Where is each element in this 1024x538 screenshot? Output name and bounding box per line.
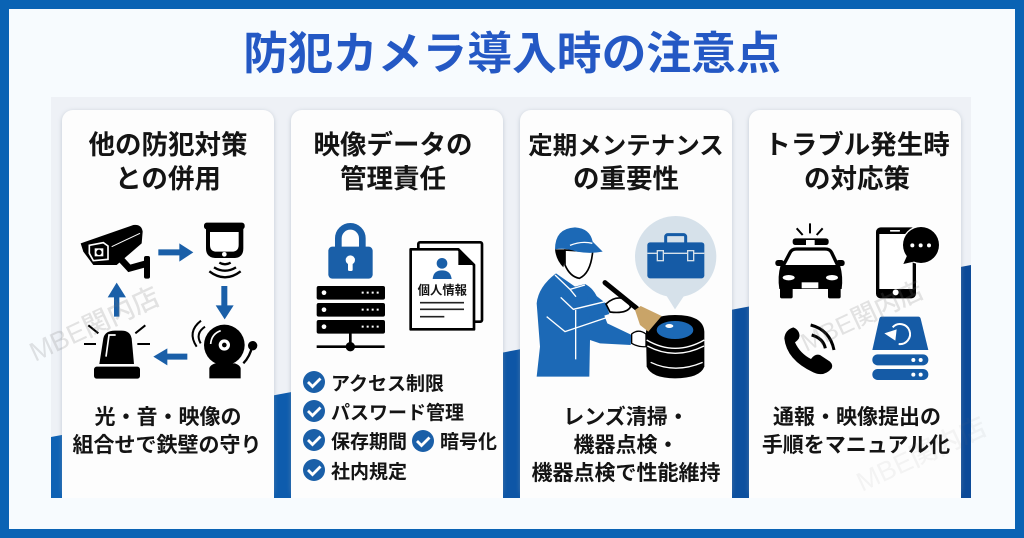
- caption: 手順をマニュアル化: [762, 434, 950, 457]
- icon: server: [317, 286, 385, 351]
- arrow: up: [108, 283, 126, 317]
- icons: response tools: [775, 223, 940, 380]
- icon: siren: [84, 325, 150, 379]
- check item: [303, 459, 407, 483]
- panel: trouble response: [749, 110, 961, 498]
- check item: 保存期間: [331, 431, 407, 453]
- icon: technician cleaning lens: [537, 216, 716, 378]
- caption: レンズ清掃・: [563, 405, 689, 429]
- caption: 組合せで鉄壁の守り: [72, 434, 262, 457]
- check item: 社内規定: [331, 461, 407, 483]
- arrow: left: [153, 348, 187, 365]
- title: 防犯カメラ導入時の注意点: [243, 29, 781, 79]
- arrow: down: [216, 286, 234, 319]
- check item: パスワード管理: [331, 401, 464, 424]
- checklist: [303, 371, 497, 483]
- icon: worker: [537, 227, 646, 377]
- caption: [762, 406, 950, 457]
- icon: security cycle: [81, 223, 257, 379]
- watermarks: [25, 276, 991, 497]
- heading: トラブル発生時: [764, 130, 950, 160]
- heading: との併用: [115, 164, 221, 194]
- caption: 光・音・映像の: [94, 406, 242, 429]
- watermarks: MBE関内店: [852, 411, 991, 497]
- icon: lens: [646, 315, 704, 378]
- icon: toolbox bubble: [635, 216, 716, 309]
- icon: lock: [328, 226, 373, 279]
- background band with rising blue wedge: [51, 97, 971, 498]
- caption: [532, 405, 720, 485]
- icon: backup disk: [872, 317, 928, 380]
- heading: 定期メンテナンス: [528, 132, 724, 160]
- icons: lock server and document: [317, 226, 482, 351]
- heading: 他の防犯対策: [88, 130, 248, 160]
- icon: brush: [605, 283, 662, 332]
- panel: video data management: [291, 110, 503, 498]
- panel: other crime prevention: [62, 110, 274, 498]
- heading: [764, 130, 950, 194]
- heading: [528, 132, 724, 194]
- icon: police car: [775, 223, 845, 298]
- heading: [314, 130, 472, 194]
- heading: 映像データの: [314, 130, 472, 160]
- heading: の対応策: [804, 164, 910, 194]
- icon: personal info document: 個人情報: [418, 283, 468, 298]
- check item: アクセス制限: [331, 373, 444, 395]
- caption: [72, 406, 262, 457]
- check item: [303, 429, 407, 453]
- caption: 機器点検で性能維持: [532, 462, 720, 485]
- icon: handset: [784, 325, 834, 374]
- icon: motion sensor: [204, 223, 245, 277]
- heading: [88, 130, 248, 194]
- check item: [412, 430, 497, 453]
- icon: smartphone: [876, 226, 940, 298]
- panel: regular maintenance: [520, 110, 732, 498]
- caption: 通報・映像提出の: [773, 406, 941, 429]
- heading: 管理責任: [340, 164, 446, 194]
- check item: 暗号化: [440, 431, 497, 453]
- watermarks: MBE関内店: [25, 281, 164, 367]
- icon: personal info document: [411, 242, 482, 329]
- caption: 機器点検・: [574, 434, 678, 457]
- arrow: right: [158, 243, 193, 262]
- icon: camera: [81, 225, 150, 279]
- watermarks: MBE関内店: [797, 276, 928, 357]
- heading: の重要性: [573, 164, 679, 194]
- icon: bell: [193, 321, 257, 378]
